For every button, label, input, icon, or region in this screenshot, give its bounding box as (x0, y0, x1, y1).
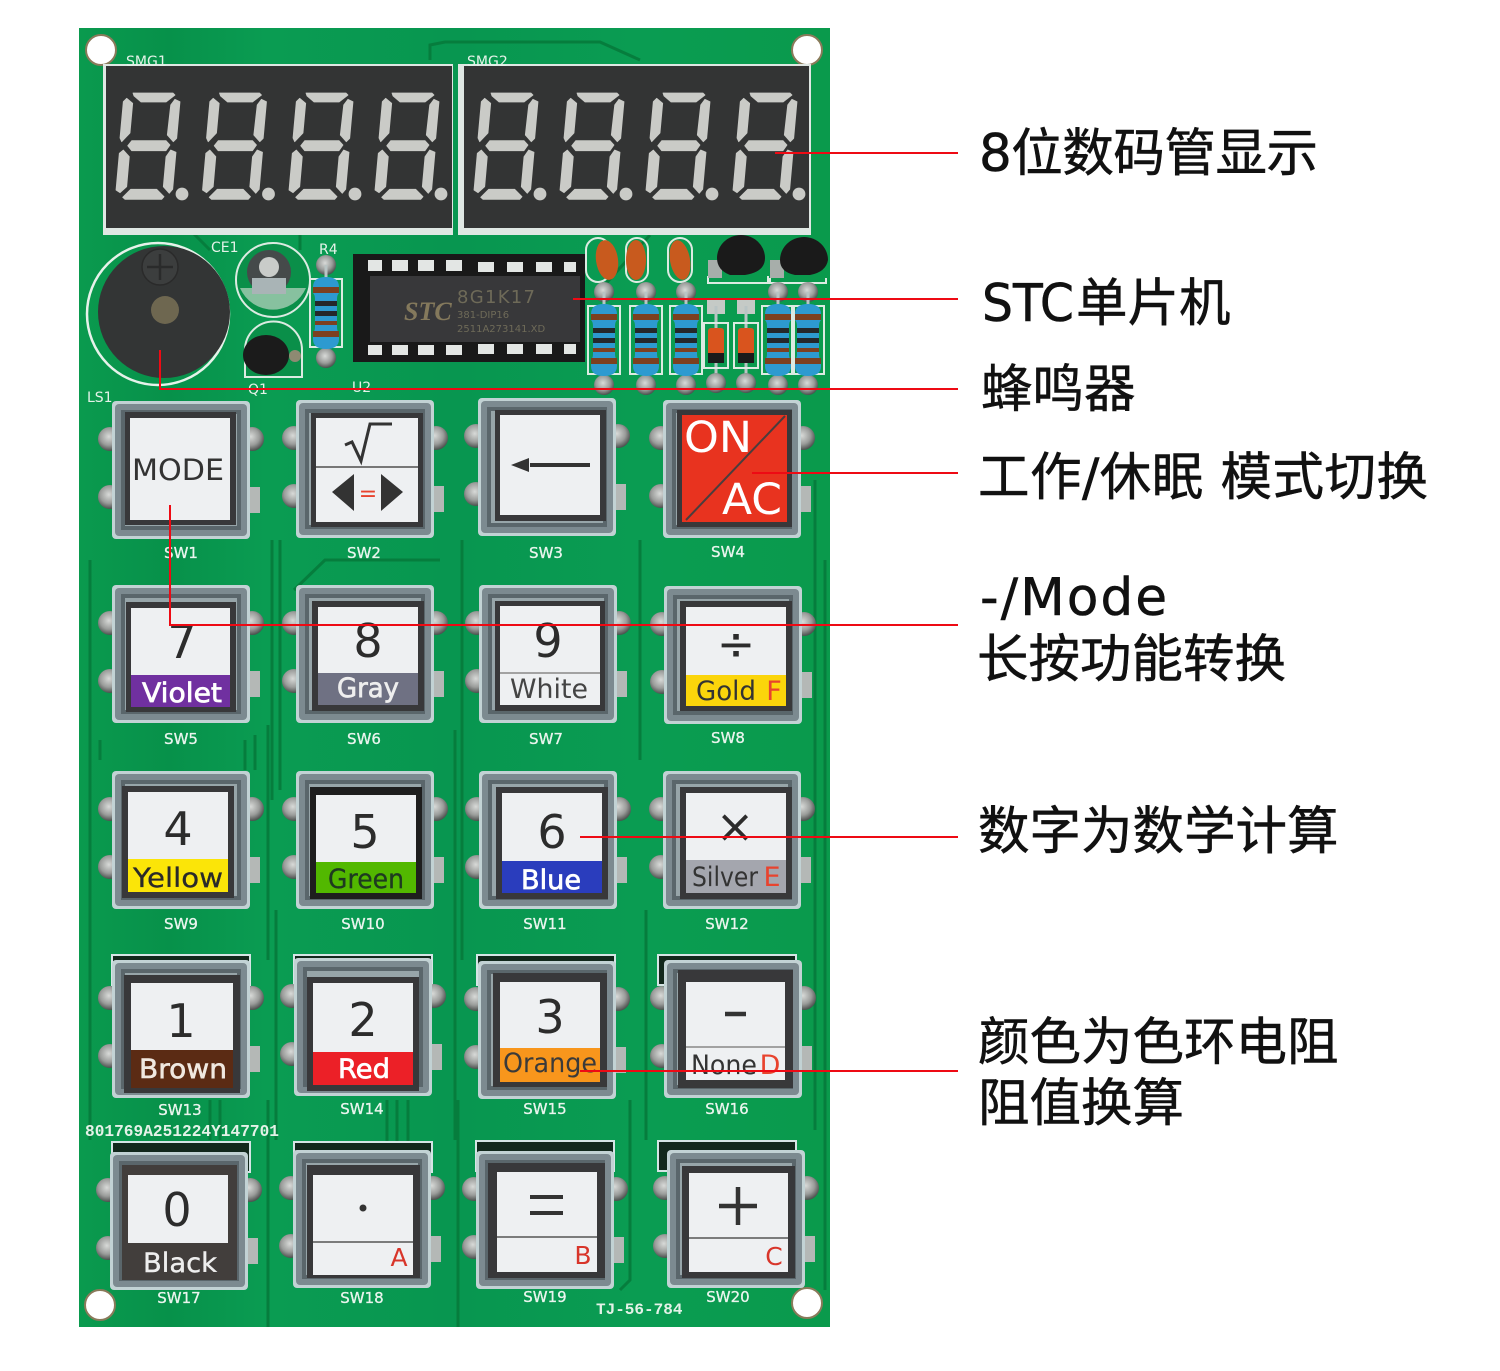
silkscreen labels: top: LS1 (87, 390, 113, 406)
panel: PCB board (79, 28, 830, 1327)
callout: sleep mode: 工作/休眠 模式切换 (978, 448, 1428, 508)
key: 8 Gray: Gray (337, 673, 399, 704)
icon: resistor R4 (310, 255, 342, 368)
key: divide Gold F (650, 586, 816, 747)
key: 0 Black: SW17 (157, 1289, 201, 1307)
callout: mode key: 长按功能转换 (977, 630, 1286, 690)
key: 4 Yellow: Yellow (132, 863, 223, 894)
key: 2 Red: Red (338, 1054, 390, 1085)
callout: colours: 颜色为色环电阻 (978, 1013, 1339, 1073)
key: 9 White: SW7 (529, 730, 563, 748)
callout: buzzer: 蜂鸣器 (981, 360, 1136, 420)
key: 3 Orange: Orange (503, 1048, 597, 1079)
key: 7 Violet: SW5 (164, 730, 198, 748)
key: sqrt and arrows: SW2 (347, 544, 381, 562)
callout: display: 8位数码管显示 (979, 124, 1318, 184)
key: 8 Gray (282, 585, 448, 748)
callout: MCU: STC (982, 274, 1074, 334)
silkscreen labels: top: SMG2 (467, 54, 508, 70)
key: minus None D: D (760, 1050, 780, 1081)
key: multiply Silver E: E (763, 862, 781, 893)
key: sqrt and arrows: = (359, 482, 377, 507)
icon: STC chip U2: 2511A273141.XD (457, 324, 545, 335)
key: dot A (279, 1142, 445, 1307)
silkscreen: board serial: 801769A251224Y147701 (85, 1122, 279, 1141)
callout: colours: 阻值换算 (978, 1074, 1184, 1134)
key: equals B: SW19 (523, 1288, 567, 1306)
key: 5 Green: SW10 (341, 915, 385, 933)
key: equals B: B (574, 1241, 592, 1270)
panel: 7-seg display SMG1 (103, 64, 453, 235)
silkscreen labels: top: SMG1 (126, 54, 167, 70)
key: sqrt and arrows (282, 400, 448, 562)
key: ON/AC: SW4 (711, 543, 745, 561)
key: 1 Brown: Brown (139, 1054, 227, 1085)
callout lines (160, 153, 958, 1071)
key: 2 Red: 2 (348, 993, 378, 1047)
icon: capacitor CE1 (236, 243, 310, 317)
key: plus C (653, 1141, 819, 1306)
key: divide Gold F: F (766, 676, 782, 707)
icon: STC chip U2: 381-DIP16 (457, 310, 509, 321)
key: 5 Green: Green (328, 864, 404, 895)
key: multiply Silver E: Silver (692, 862, 759, 893)
key: 7 Violet: Violet (142, 678, 222, 709)
key: multiply Silver E: × (716, 799, 754, 853)
traces (90, 42, 825, 1327)
key: 4 Yellow: 4 (163, 802, 193, 856)
callout: numbers: 数字为数学计算 (978, 802, 1339, 862)
key: 3 Orange (464, 955, 630, 1118)
key: minus None D: None (691, 1050, 757, 1081)
key: 6 Blue: 6 (537, 805, 567, 859)
icon: buzzer (87, 243, 230, 385)
callout: MCU: 单片机 (1076, 274, 1231, 334)
key: divide Gold F: ÷ (717, 617, 755, 671)
key: divide Gold F: Gold (696, 676, 756, 707)
key: 4 Yellow (98, 771, 264, 933)
key: 5 Green: 5 (350, 805, 380, 859)
key: 1 Brown: SW13 (158, 1101, 202, 1119)
key: multiply Silver E: SW12 (705, 915, 749, 933)
key: 7 Violet: 7 (167, 615, 197, 669)
key: multiply Silver E (649, 771, 815, 933)
key: backspace arrow (464, 398, 630, 562)
key: 2 Red (280, 955, 446, 1118)
key: 1 Brown (98, 955, 264, 1119)
callout: MCU (982, 274, 1231, 334)
key: 3 Orange: SW15 (523, 1100, 567, 1118)
icon: resistors and diodes (588, 282, 824, 395)
key: 4 Yellow: SW9 (164, 915, 198, 933)
callout: mode key: -/Mode (980, 568, 1167, 628)
key: plus C: SW20 (706, 1288, 750, 1306)
key: 3 Orange: 3 (535, 990, 565, 1044)
icon: STC chip U2: 8G1K17 (457, 287, 535, 308)
key: 6 Blue: SW11 (523, 915, 567, 933)
key: dot A: SW18 (340, 1289, 384, 1307)
silkscreen labels: top: CE1 (211, 240, 239, 256)
key: 0 Black: Black (143, 1248, 217, 1279)
key: 0 Black: 0 (162, 1183, 192, 1237)
key: MODE: MODE (132, 453, 224, 487)
key: 2 Red: SW14 (340, 1100, 384, 1118)
key: 6 Blue (465, 771, 631, 933)
icon: transistors Q2 Q3 (708, 235, 828, 283)
key: ON/AC: ON (684, 413, 752, 463)
silkscreen labels: top: R4 (319, 242, 338, 258)
mounting holes (85, 35, 822, 1320)
key: dot A: A (390, 1243, 408, 1272)
icon: STC chip U2 (353, 254, 585, 362)
key: minus None D: SW16 (705, 1100, 749, 1118)
key: 0 Black (96, 1142, 262, 1307)
key: divide Gold F: SW8 (711, 729, 745, 747)
key: 9 White: White (510, 674, 588, 705)
key: 9 White (465, 585, 631, 748)
silkscreen labels: top (87, 54, 508, 406)
silkscreen labels: top: Q1 (248, 382, 268, 398)
key: equals B (462, 1141, 628, 1306)
key: ON/AC (649, 400, 815, 561)
key: 1 Brown: 1 (166, 994, 196, 1048)
icon: transistor Q1 (243, 322, 302, 377)
icon: ceramic capacitors (586, 238, 693, 282)
silkscreen labels: top: U2 (352, 380, 371, 396)
key: 8 Gray: SW6 (347, 730, 381, 748)
key: 6 Blue: Blue (521, 865, 581, 896)
key: 9 White: 9 (533, 614, 563, 668)
key: MODE: SW1 (164, 544, 198, 562)
key: backspace arrow: SW3 (529, 544, 563, 562)
key: plus C: C (765, 1242, 783, 1271)
key: MODE (98, 401, 264, 562)
key: 5 Green (282, 771, 448, 933)
key: minus None D (650, 955, 816, 1118)
callout: colours (978, 1013, 1339, 1134)
panel: 7-seg display SMG2 (458, 64, 811, 235)
key: 7 Violet (98, 585, 264, 748)
key: ON/AC: AC (722, 475, 782, 525)
silkscreen: board model: TJ-56-784 (596, 1301, 683, 1319)
icon: STC chip U2: STC (404, 297, 452, 326)
key: 8 Gray: 8 (353, 614, 383, 668)
callout: mode key (977, 568, 1286, 690)
